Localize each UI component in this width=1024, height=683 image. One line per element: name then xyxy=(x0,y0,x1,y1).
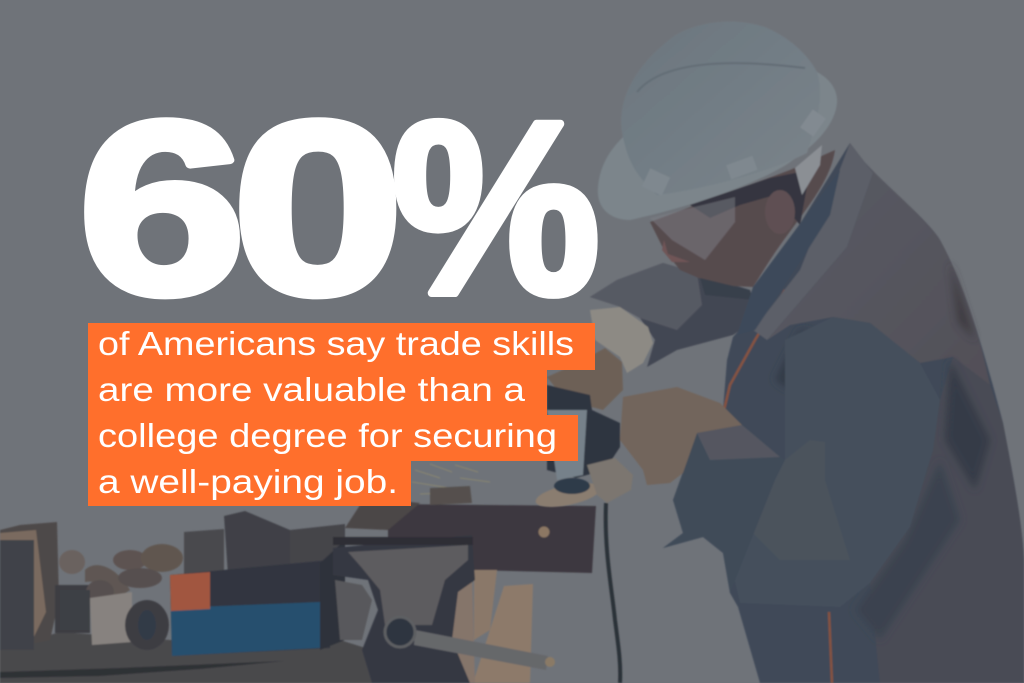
jacket upper shoulder xyxy=(767,143,990,385)
digit 0: 0 xyxy=(232,71,404,346)
table top xyxy=(0,632,372,683)
upper glove xyxy=(547,307,653,410)
highlight background xyxy=(88,323,595,506)
photo: workbench with vise and scrap metal xyxy=(0,464,596,683)
shadow folds xyxy=(775,262,990,640)
collar xyxy=(737,143,873,340)
metal cylinders left xyxy=(0,522,90,650)
statement line 3: college degree for securing xyxy=(98,417,557,454)
vise handle xyxy=(385,617,555,670)
callout: orange highlighted statement xyxy=(88,323,595,506)
grinder cable xyxy=(606,503,620,683)
sparks xyxy=(412,464,490,494)
statement line 4: a well-paying job. xyxy=(98,463,398,500)
digit 6: 6 xyxy=(78,71,246,346)
white tin can xyxy=(90,592,132,645)
scrap stack under grinder xyxy=(430,486,472,505)
head and neck xyxy=(650,150,835,300)
safety glasses xyxy=(650,197,735,260)
photo: worker with hard hat and grinder xyxy=(534,22,1024,683)
upright metal pieces xyxy=(184,529,224,578)
headline: 60% xyxy=(78,71,600,346)
orange piping xyxy=(724,290,832,683)
jacket sleeve cuff xyxy=(663,425,785,593)
statement line 2: are more valuable than a xyxy=(98,371,526,408)
metal plate in vise xyxy=(388,504,596,573)
chain pile xyxy=(59,544,183,630)
percent sign: % xyxy=(392,71,600,346)
jacket body xyxy=(663,143,1024,683)
blue and red box xyxy=(170,540,345,656)
angle grinder xyxy=(534,385,633,512)
wood planks xyxy=(474,570,497,640)
lower glove xyxy=(620,387,742,485)
hard hat xyxy=(598,22,837,220)
statement line 1: of Americans say trade skills xyxy=(98,325,574,362)
bench vise xyxy=(333,535,475,683)
raised sleeve xyxy=(590,263,755,367)
large sleeve arm xyxy=(730,317,940,607)
lower right jacket panel xyxy=(870,357,1024,683)
